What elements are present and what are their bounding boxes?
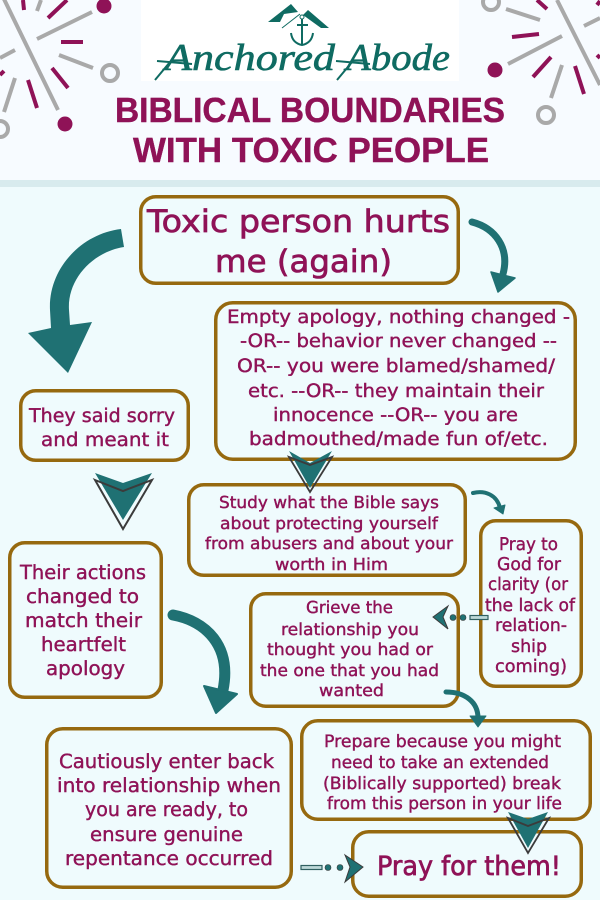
box: cautiously enter back: repentance occurred bbox=[65, 847, 273, 870]
box: grieve the relationship: Grieve the bbox=[306, 598, 393, 617]
box: toxic person hurts me bbox=[141, 197, 458, 283]
dotted arrow: pray to grieve bbox=[433, 606, 488, 629]
box: pray to God for clarity: clarity (or bbox=[488, 575, 569, 595]
box: pray for them bbox=[353, 832, 581, 896]
box: empty apology: Empty apology, nothing changed - bbox=[227, 307, 570, 328]
box: their actions changed bbox=[10, 543, 161, 697]
title: BIBLICAL BOUNDARIES bbox=[115, 91, 505, 130]
box: prepare for a break: Prepare because you might bbox=[324, 732, 561, 752]
box: prepare for a break: (Biblically supported) break bbox=[323, 774, 561, 794]
curved arrow: their actions to cautiously enter bbox=[173, 615, 237, 713]
box: empty apology: etc. --OR-- they maintain their bbox=[248, 381, 544, 402]
box: their actions changed: changed to bbox=[26, 585, 139, 608]
chevron: sorry to actions bbox=[95, 473, 152, 529]
box: cautiously enter back: you are ready, to bbox=[85, 798, 248, 821]
box: cautiously enter back: ensure genuine bbox=[90, 823, 243, 846]
box: grieve the relationship: relationship you bbox=[281, 620, 419, 639]
box: toxic person hurts me: me (again) bbox=[215, 244, 392, 280]
box: their actions changed: apology bbox=[46, 657, 125, 680]
box: their actions changed: Their actions bbox=[19, 561, 146, 584]
box: empty apology: innocence --OR-- you are bbox=[273, 405, 518, 426]
box: study the Bible: Study what the Bible says bbox=[219, 493, 439, 512]
curved arrow to "Empty apology" bbox=[472, 222, 515, 292]
box: grieve the relationship: wanted bbox=[319, 681, 384, 700]
curved arrow: grieve to prepare bbox=[446, 692, 486, 727]
box: grieve the relationship: the one that you had bbox=[260, 661, 439, 680]
curved arrow: study to pray bbox=[473, 492, 505, 514]
box: their actions changed: match their bbox=[25, 609, 143, 632]
box: empty apology: -OR-- behavior never changed -- bbox=[240, 331, 557, 352]
box: pray to God for clarity: relation- bbox=[495, 616, 567, 636]
header band bbox=[0, 0, 600, 180]
box: they said sorry: They said sorry bbox=[28, 405, 175, 427]
box: empty apology: OR-- you were blamed/shamed/ bbox=[237, 356, 556, 377]
box: cautiously enter back: into relationship when bbox=[57, 774, 281, 797]
box: study the Bible: from abusers and about your bbox=[205, 534, 453, 553]
box: pray to God for clarity: coming) bbox=[495, 657, 567, 677]
dotted arrow: cautiously enter to pray for them bbox=[301, 855, 363, 882]
box: empty apology bbox=[216, 303, 575, 459]
box: their actions changed: heartfelt bbox=[41, 633, 126, 656]
decoration: left firework bbox=[0, 0, 118, 137]
header divider strip bbox=[0, 180, 600, 187]
box: prepare for a break bbox=[302, 721, 590, 819]
box: grieve the relationship bbox=[251, 594, 458, 706]
logo: Anchored Abode: Abode bbox=[343, 37, 450, 79]
chevron: prepare to pray for them bbox=[508, 812, 549, 853]
box: prepare for a break: need to take an extended bbox=[331, 753, 549, 773]
box: pray to God for clarity: the lack of bbox=[485, 596, 576, 616]
box: toxic person hurts me: Toxic person hurts bbox=[146, 204, 450, 240]
chevron: empty apology to study bbox=[289, 451, 332, 492]
box: cautiously enter back bbox=[47, 729, 291, 887]
box: cautiously enter back: Cautiously enter back bbox=[59, 750, 275, 773]
box: study the Bible: worth in Him bbox=[275, 555, 388, 574]
title bbox=[115, 91, 505, 170]
title: WITH TOXIC PEOPLE bbox=[133, 131, 489, 170]
box: grieve the relationship: thought you had or bbox=[267, 640, 433, 659]
box: pray to God for clarity: Pray to bbox=[499, 535, 558, 555]
decoration: right firework bbox=[483, 0, 600, 123]
big curved arrow to "They said sorry" bbox=[28, 229, 124, 373]
logo: Anchored Abode bbox=[141, 0, 459, 81]
box: study the Bible bbox=[189, 485, 465, 575]
box: they said sorry: and meant it bbox=[41, 429, 169, 451]
box: pray to God for clarity bbox=[481, 521, 581, 686]
box: pray to God for clarity: God for bbox=[497, 555, 562, 575]
box: study the Bible: about protecting yourself bbox=[220, 514, 439, 533]
box: they said sorry bbox=[21, 391, 188, 460]
box: prepare for a break: from this person in your life bbox=[327, 794, 562, 814]
box: pray to God for clarity: ship bbox=[511, 637, 547, 657]
box: pray for them: Pray for them! bbox=[377, 851, 561, 882]
logo: Anchored Abode: Anchored bbox=[162, 37, 336, 79]
box: empty apology: badmouthed/made fun of/etc. bbox=[249, 429, 548, 450]
